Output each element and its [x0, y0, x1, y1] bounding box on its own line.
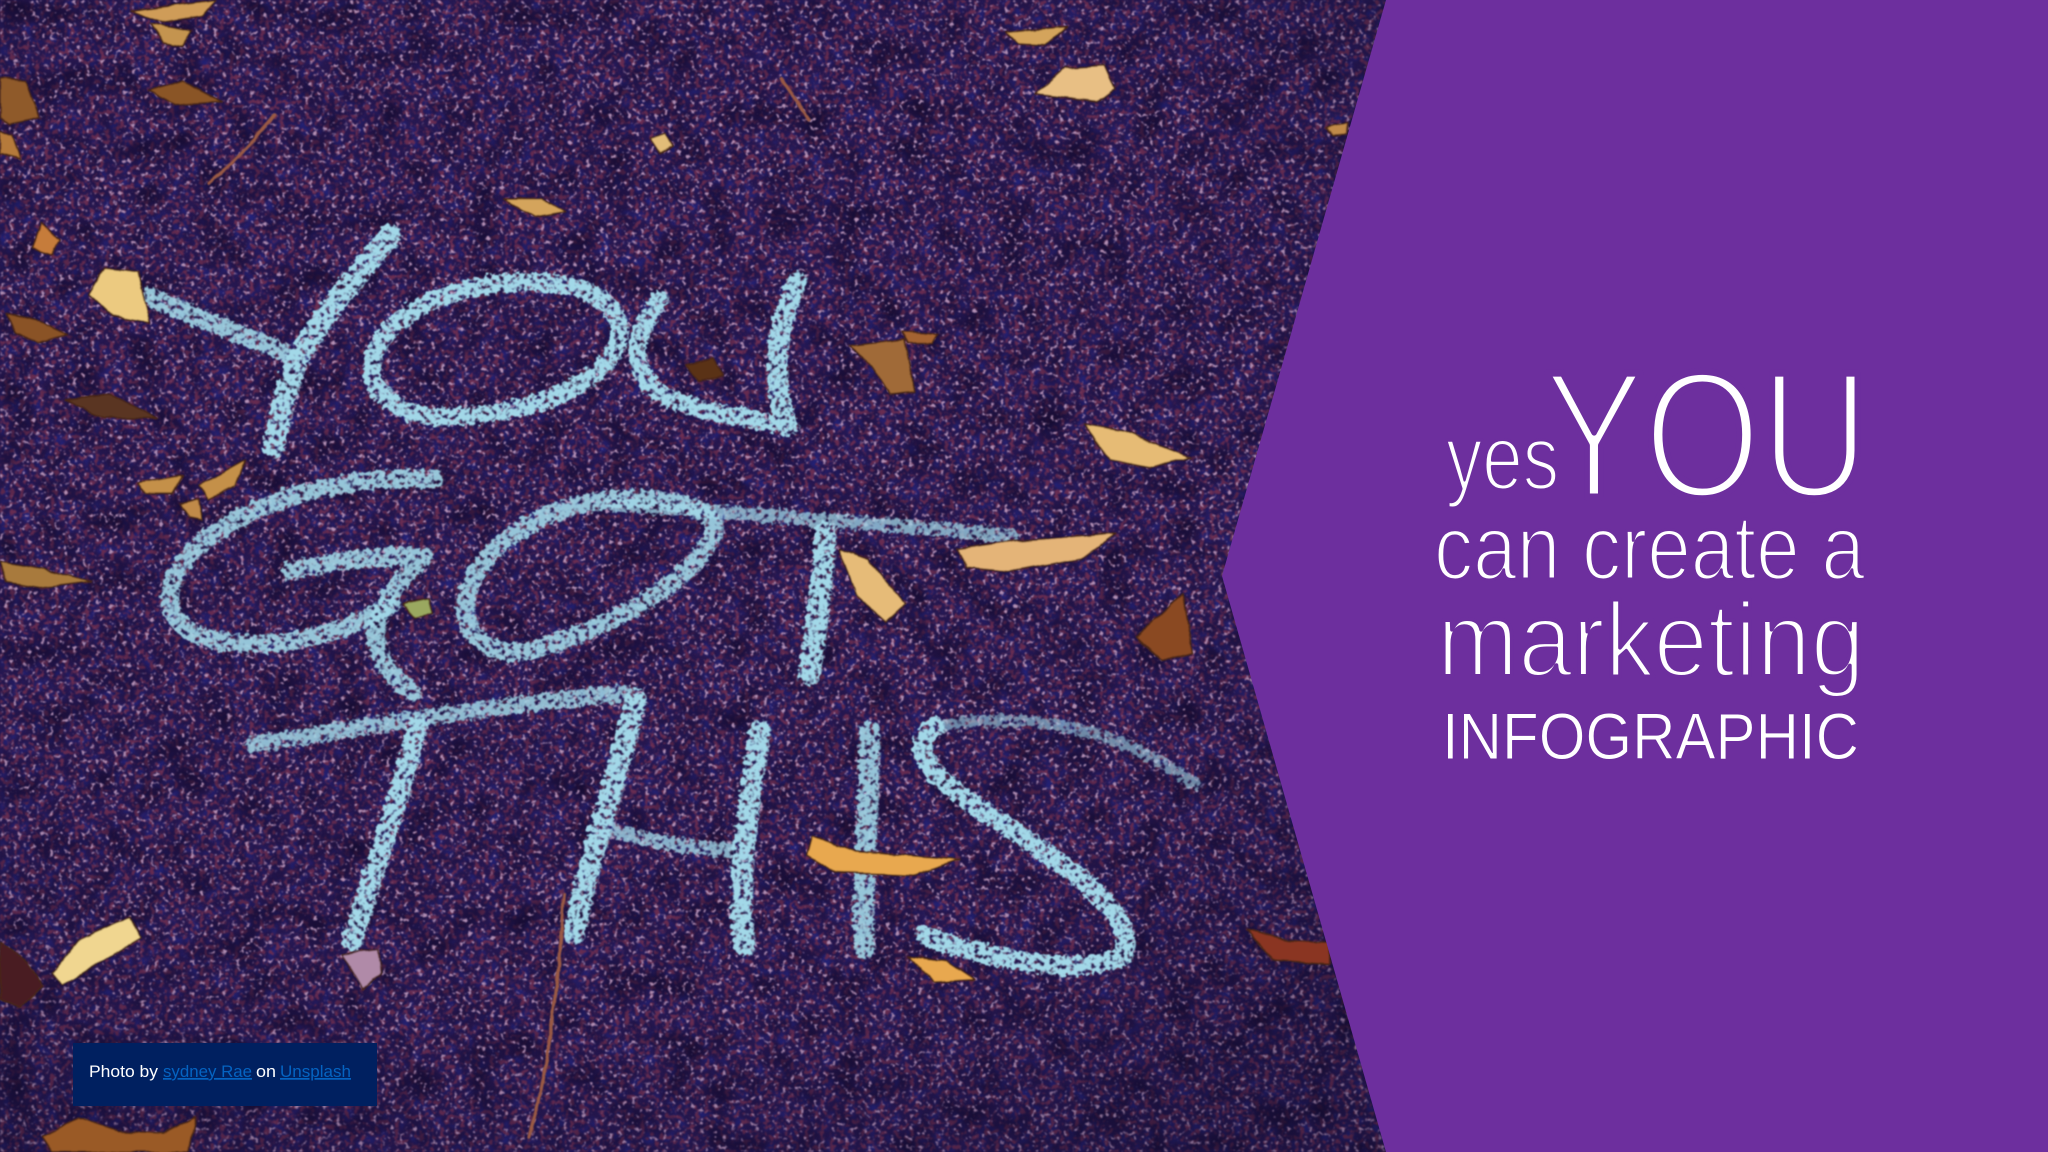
headline line: marketing: marketing — [1437, 581, 1865, 699]
credit text: on — [256, 1062, 276, 1081]
photo: asphalt with chalk writing and leaves — [0, 0, 1400, 1152]
fallen leaves and twigs — [0, 0, 1349, 1152]
headline line: can create a: can create a — [1434, 497, 1866, 599]
asphalt base — [0, 0, 1400, 1152]
credit text: sydney Rae — [163, 1062, 252, 1081]
headline word: YOU: YOU — [1544, 335, 1869, 536]
asphalt reddish grain — [0, 0, 1400, 1152]
asphalt dark patches — [0, 0, 1400, 1152]
headline line: INFOGRAPHIC: INFOGRAPHIC — [1442, 699, 1859, 773]
credit background — [73, 1043, 377, 1106]
asphalt blue patches — [0, 0, 1400, 1152]
credit text: Photo by — [89, 1062, 159, 1081]
asphalt light specks — [0, 0, 1400, 1152]
purple chevron panel — [1222, 0, 2048, 1152]
headline — [1434, 335, 1869, 773]
headline word: yes: yes — [1446, 407, 1559, 509]
photo credit — [73, 1043, 377, 1106]
asphalt shading — [0, 0, 1400, 1152]
credit text: Unsplash — [280, 1062, 351, 1081]
chalk writing — [150, 235, 1195, 965]
